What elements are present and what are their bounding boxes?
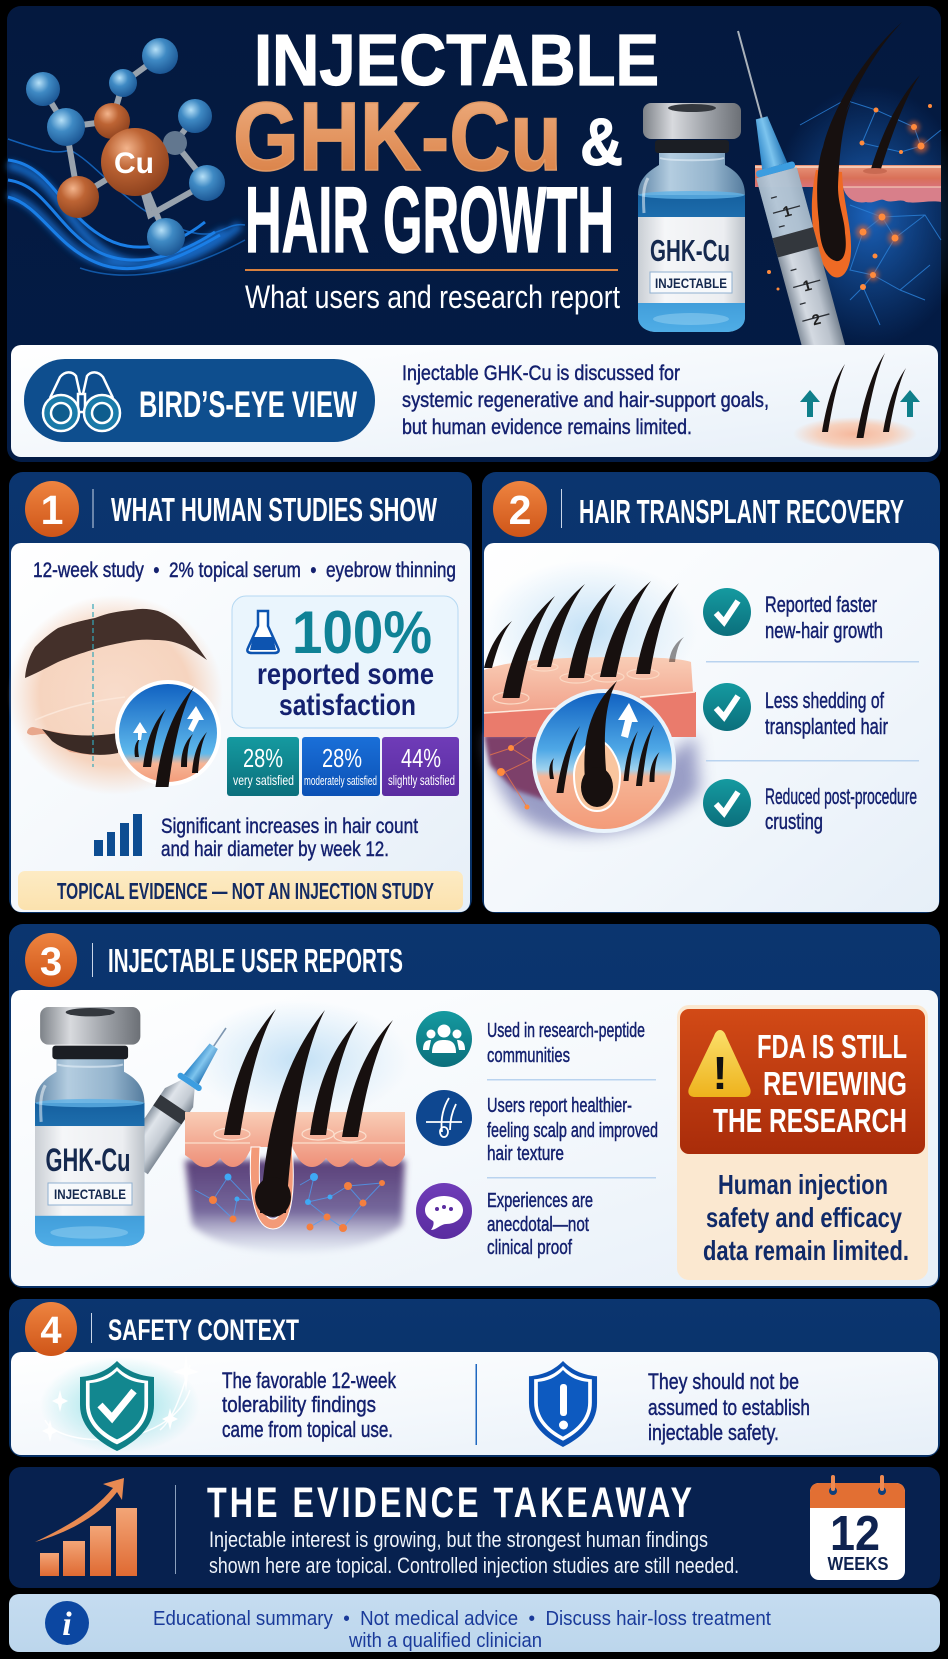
report: anecdotal experiences — [416, 1183, 593, 1259]
stat: 28 percent moderately satisfied: 28% — [322, 743, 362, 773]
heading 4: SAFETY CONTEXT — [108, 1314, 299, 1347]
stat: 44 percent slightly satisfied — [382, 737, 459, 796]
takeaway text — [209, 1527, 739, 1578]
icon: info — [45, 1601, 89, 1645]
icon: 12 weeks calendar — [810, 1475, 905, 1580]
heading 3: INJECTABLE USER REPORTS — [108, 942, 403, 979]
heading 3 — [25, 933, 403, 987]
stat: 28 percent very satisfied — [227, 737, 299, 796]
heading 2 — [493, 481, 904, 537]
report: anecdotal experiences: Experiences are — [487, 1190, 593, 1212]
icon: syringe — [120, 1018, 240, 1174]
benefit: less shedding: transplanted hair — [765, 714, 888, 739]
callout: 100 percent satisfaction: satisfaction — [279, 689, 416, 722]
text: not injectable safety: assumed to establish — [648, 1395, 810, 1420]
text: topical tolerability: came from topical use. — [222, 1417, 393, 1442]
text: not injectable safety: injectable safety. — [648, 1420, 779, 1445]
icon: syringe: 1 — [781, 203, 793, 221]
callout: 100 percent satisfaction: reported some — [257, 658, 434, 691]
callout: 100 percent satisfaction: 100% — [292, 599, 432, 666]
magnified follicle inset — [117, 682, 219, 787]
panel 3: injectable user reports — [9, 924, 940, 1288]
icon: syringe — [718, 25, 848, 366]
callout: FDA review: REVIEWING — [763, 1065, 907, 1102]
icon: GHK-Cu vial — [35, 1007, 144, 1246]
icon: follicle — [426, 1098, 462, 1137]
stat: 44 percent slightly satisfied: slightly satisfied — [388, 772, 455, 788]
panel 1: what human studies show — [7, 472, 472, 913]
overview text: but human evidence remains limited. — [402, 416, 692, 439]
report: healthier-feeling scalp: Users report healthier- — [487, 1095, 632, 1117]
subtitle: What users and research report — [245, 279, 620, 315]
footer disclaimer: with a qualified clinician — [348, 1630, 542, 1652]
stat: 44 percent slightly satisfied: 44% — [401, 743, 441, 773]
icon: hair growth arrows — [793, 353, 920, 451]
benefit: faster growth — [703, 588, 883, 643]
text: topical tolerability: tolerability findings — [222, 1392, 376, 1417]
footer disclaimer: Educational summary • Not medical advice • Discuss hair-loss treatment — [153, 1608, 771, 1630]
heading 1: WHAT HUMAN STUDIES SHOW — [111, 491, 438, 528]
benefit: less shedding: Less shedding of — [765, 688, 885, 713]
icon: bar chart — [94, 814, 142, 856]
icon: warning triangle: ! — [712, 1047, 728, 1099]
icon: syringe: 3 — [819, 343, 831, 361]
takeaway heading: THE EVIDENCE TAKEAWAY — [207, 1479, 695, 1527]
title: HAIR GROWTH — [245, 167, 614, 272]
panel: header — [7, 6, 948, 462]
report: healthier-feeling scalp: feeling scalp and improved — [487, 1120, 658, 1142]
icon: flowing blue waves — [8, 139, 245, 275]
benefit: reduced crusting — [703, 779, 917, 834]
callout: FDA review: Human injection — [718, 1169, 888, 1200]
icon: GHK-Cu vial: GHK-Cu — [46, 1142, 130, 1178]
takeaway text: shown here are topical. Controlled injection studies are still needed. — [209, 1553, 739, 1578]
stat: 28 percent very satisfied: very satisfied — [233, 772, 294, 788]
overview text — [402, 362, 769, 439]
title: & — [580, 105, 623, 180]
report: research-peptide communities: communities — [487, 1045, 570, 1067]
icon: syringe: 1 — [801, 277, 814, 296]
report: anecdotal experiences: clinical proof — [487, 1237, 572, 1259]
illustration: scalp cross section — [185, 1000, 410, 1253]
title: GHK-Cu — [233, 82, 562, 191]
benefit: faster growth: Reported faster — [765, 592, 877, 617]
icon: GHK-Cu vial: INJECTABLE — [655, 275, 727, 291]
benefit: less shedding — [703, 683, 888, 739]
finding text: Significant increases in hair count — [161, 815, 418, 838]
report: healthier-feeling scalp — [416, 1090, 658, 1165]
heading 4: 4 — [40, 1310, 62, 1352]
text: not injectable safety: They should not be — [648, 1369, 799, 1394]
title — [233, 21, 659, 272]
icon: rising bar chart — [35, 1478, 137, 1576]
text: not injectable safety — [648, 1369, 810, 1445]
report: research-peptide communities: Used in research-peptide — [487, 1020, 645, 1042]
report: research-peptide communities — [416, 1011, 645, 1067]
stat: 28 percent very satisfied: 28% — [243, 743, 283, 773]
stat: 28 percent moderately satisfied — [302, 737, 380, 796]
icon: copper peptide molecule — [26, 38, 225, 256]
eyebrow illustration — [7, 595, 223, 795]
callout: topical evidence: TOPICAL EVIDENCE — NOT AN INJECTION STUDY — [57, 878, 434, 904]
panel: bird's-eye view — [11, 345, 938, 457]
icon: 12 weeks calendar: 12 — [830, 1507, 880, 1561]
icon: GHK-Cu vial: GHK-Cu — [650, 233, 730, 268]
benefit: faster growth: new-hair growth — [765, 618, 883, 643]
icon: speech bubble — [425, 1196, 463, 1230]
heading 2: 2 — [509, 487, 531, 533]
icon: GHK-Cu vial: INJECTABLE — [54, 1186, 126, 1202]
heading pill — [24, 359, 375, 442]
panel: evidence takeaway — [9, 1467, 940, 1588]
icon: warning triangle — [688, 1030, 751, 1099]
magnified follicle inset — [534, 681, 674, 831]
overview text: systemic regenerative and hair-support goals, — [402, 389, 769, 412]
stat: 28 percent moderately satisfied: moderately satisfied — [304, 773, 377, 788]
footer disclaimer — [9, 1594, 940, 1652]
callout: 100 percent satisfaction — [232, 596, 458, 728]
finding text — [161, 815, 418, 861]
heading 3: 3 — [40, 940, 62, 984]
heading 1: 1 — [41, 487, 63, 533]
icon: blue warning shield — [529, 1361, 597, 1447]
panel 4: safety context — [9, 1299, 940, 1457]
study details: 12-week study • 2% topical serum • eyebrow thinning — [33, 559, 456, 582]
report: anecdotal experiences: anecdotal—not — [487, 1214, 589, 1236]
icon: skin and hair illustration — [755, 22, 941, 325]
callout: FDA review — [677, 1005, 928, 1280]
icon: people — [423, 1024, 465, 1053]
icon: 12 weeks calendar: WEEKS — [828, 1554, 888, 1574]
icon: syringe: 2 — [810, 311, 823, 329]
icon: flask — [247, 611, 279, 653]
report: healthier-feeling scalp: hair texture — [487, 1143, 564, 1165]
icon: info: i — [62, 1606, 72, 1643]
heading 1 — [25, 481, 438, 537]
icon: GHK-Cu vial — [638, 103, 745, 332]
title: INJECTABLE — [254, 21, 659, 101]
text: topical tolerability — [222, 1368, 397, 1442]
panel 2: hair transplant recovery — [482, 472, 940, 913]
benefit: reduced crusting: crusting — [765, 809, 823, 834]
illustration: transplanted follicles — [482, 560, 700, 834]
icon: binoculars — [43, 372, 120, 431]
overview text: Injectable GHK-Cu is discussed for — [402, 362, 680, 385]
takeaway text: Injectable interest is growing, but the strongest human findings — [209, 1527, 708, 1552]
finding text: and hair diameter by week 12. — [161, 838, 389, 861]
icon: teal check shield — [40, 1355, 200, 1453]
callout: topical evidence — [18, 871, 463, 910]
heading 4 — [25, 1302, 299, 1356]
heading pill: BIRD’S-EYE VIEW — [139, 384, 357, 425]
icon: copper peptide molecule: Cu — [114, 147, 154, 180]
text: topical tolerability: The favorable 12-week — [222, 1368, 397, 1393]
